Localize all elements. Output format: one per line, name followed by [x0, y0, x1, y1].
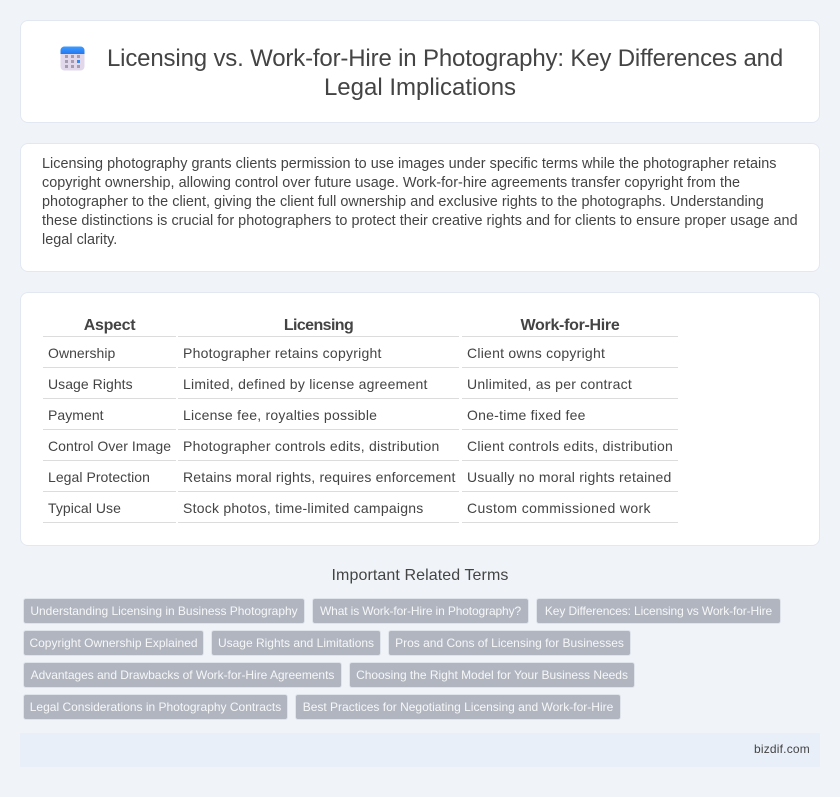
- footer credit: bizdif.com: [754, 742, 810, 756]
- row: control over image: Control Over Image: [48, 438, 171, 454]
- tag: [536, 598, 781, 624]
- footer bar: [20, 733, 820, 767]
- related terms tags: [23, 598, 781, 720]
- table header: aspect: Aspect: [84, 317, 135, 334]
- tag: Pros and Cons of Licensing for Businesses: [395, 636, 624, 650]
- row: typical use: Stock photos, time-limited campaigns: [183, 500, 424, 516]
- tag: [349, 662, 635, 688]
- row: ownership: [48, 345, 605, 361]
- row: control over image: Photographer controls edits, distribution: [183, 438, 440, 454]
- row: payment: One-time fixed fee: [467, 407, 586, 423]
- tag: Understanding Licensing in Business Photography: [30, 604, 298, 618]
- row: payment: Payment: [48, 407, 104, 423]
- row: control over image: [48, 438, 673, 454]
- tag: Key Differences: Licensing vs Work-for-Hire: [545, 604, 772, 618]
- row: usage rights: Unlimited, as per contract: [467, 376, 632, 392]
- row: usage rights: Limited, defined by license agreement: [183, 376, 428, 392]
- row: usage rights: Usage Rights: [48, 376, 133, 392]
- row: legal protection: [48, 469, 672, 485]
- panel: description: [20, 143, 820, 272]
- tag: [23, 694, 288, 720]
- row: ownership: Ownership: [48, 345, 115, 361]
- table header: licensing: Licensing: [284, 317, 353, 334]
- icon: calendar: [60, 46, 84, 70]
- row: typical use: [48, 500, 651, 516]
- description text: Licensing photography grants clients permission to use images under specific terms while the photographer retains: [42, 156, 777, 172]
- title: Licensing vs. Work-for-Hire in Photography: Key Differences and: [107, 45, 783, 72]
- panel: comparison table: [20, 292, 820, 546]
- table header: work-for-hire: Work-for-Hire: [521, 317, 619, 334]
- row: ownership: Client owns copyright: [467, 345, 605, 361]
- tag: Legal Considerations in Photography Contracts: [30, 700, 281, 714]
- tag: Advantages and Drawbacks of Work-for-Hire Agreements: [31, 668, 334, 682]
- row: typical use: Typical Use: [48, 500, 121, 516]
- description text: copyright ownership, allowing control over future usage. Work-for-hire agreements transfer copyright from the: [42, 175, 740, 191]
- tag: What is Work-for-Hire in Photography?: [320, 604, 521, 618]
- tag: [312, 598, 529, 624]
- row: ownership: Photographer retains copyright: [183, 345, 382, 361]
- row: typical use: Custom commissioned work: [467, 500, 651, 516]
- title: Legal Implications: [324, 74, 516, 101]
- row: control over image: Client controls edits, distribution: [467, 438, 673, 454]
- row: legal protection: Retains moral rights, requires enforcement: [183, 469, 456, 485]
- tag: [295, 694, 621, 720]
- tag: [23, 598, 305, 624]
- tag: Usage Rights and Limitations: [218, 636, 374, 650]
- tag: [23, 630, 204, 656]
- tag: Choosing the Right Model for Your Business Needs: [356, 668, 628, 682]
- row: legal protection: Legal Protection: [48, 469, 150, 485]
- heading: important related terms: Important Related Terms: [332, 567, 508, 584]
- tag: [388, 630, 631, 656]
- row: legal protection: Usually no moral rights retained: [467, 469, 672, 485]
- description text: these distinctions is crucial for photographers to protect their creative rights and for clients to ensure proper usage and: [42, 213, 798, 229]
- description text: legal clarity.: [42, 232, 117, 248]
- panel: header: [20, 20, 820, 123]
- tag: Best Practices for Negotiating Licensing and Work-for-Hire: [303, 700, 613, 714]
- tag: Copyright Ownership Explained: [29, 636, 198, 650]
- tag: [23, 662, 342, 688]
- row: payment: [48, 407, 586, 423]
- row: usage rights: [48, 376, 632, 392]
- description text: photographer to the client, giving the client full ownership and exclusive rights to the photographs. Understanding: [42, 194, 764, 210]
- tag: [211, 630, 381, 656]
- description text: [42, 156, 798, 248]
- row: payment: License fee, royalties possible: [183, 407, 377, 423]
- title: [107, 45, 783, 101]
